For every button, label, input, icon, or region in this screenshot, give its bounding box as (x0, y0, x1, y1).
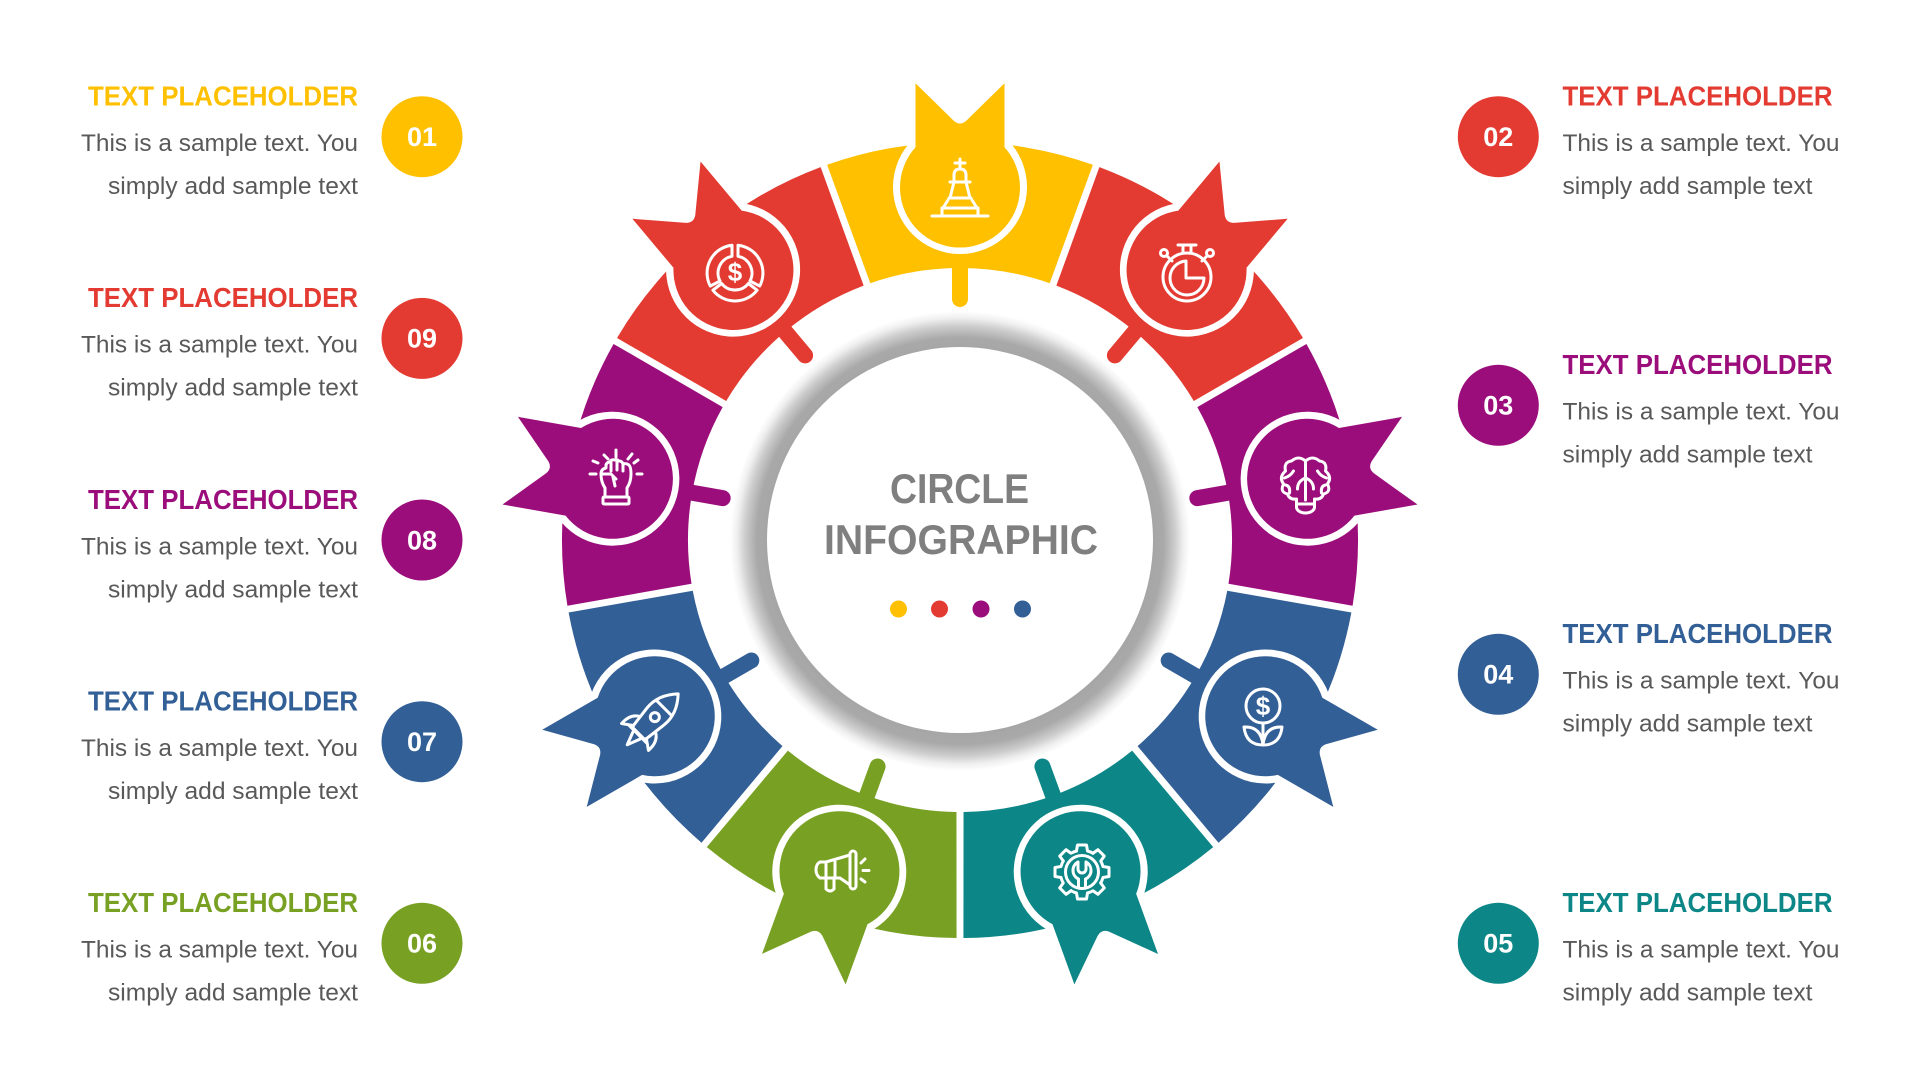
center circle (767, 347, 1153, 733)
icon: brain bulb (1281, 458, 1330, 513)
segment 09 red (565, 105, 912, 447)
icon: money plant (1244, 689, 1282, 745)
segment 04 blue (1095, 541, 1422, 883)
item 08: simply add sample text (108, 576, 358, 603)
icon: chess king (932, 159, 988, 216)
item 07: TEXT PLACEHOLDER (88, 686, 358, 716)
item 06: 06 (407, 929, 437, 959)
segment 07 blue (498, 541, 825, 883)
item 04: This is a sample text. You (1562, 668, 1840, 695)
item 05: simply add sample text (1562, 980, 1813, 1007)
item 07 (81, 686, 462, 805)
center dots (890, 600, 1031, 618)
item 03: This is a sample text. You (1562, 399, 1840, 426)
center circle shadow (730, 311, 1190, 771)
item 07: simply add sample text (108, 778, 358, 805)
item 05: This is a sample text. You (1562, 937, 1840, 964)
icon: dollar chart: $ (728, 257, 743, 287)
item 07: This is a sample text. You (81, 735, 358, 762)
item 05: TEXT PLACEHOLDER (1562, 887, 1832, 918)
item 08: This is a sample text. You (81, 533, 358, 560)
item 09: simply add sample text (108, 375, 358, 402)
icon: gear wrench (1055, 845, 1109, 899)
item 05: 05 (1483, 929, 1513, 959)
segment 01 yellow (827, 83, 1093, 307)
segment 02 red (1008, 105, 1355, 447)
item 01 (81, 80, 462, 200)
item 03: 03 (1483, 391, 1513, 421)
icon: rocket (614, 680, 692, 758)
item 07: 07 (407, 727, 437, 757)
item 09: TEXT PLACEHOLDER (88, 282, 358, 313)
item 02: 02 (1483, 122, 1513, 152)
item 06: TEXT PLACEHOLDER (88, 887, 358, 918)
segment 06 green (679, 713, 1005, 1015)
item 03 (1458, 349, 1840, 469)
item 08: TEXT PLACEHOLDER (88, 484, 358, 515)
segment 03 purple (1166, 330, 1433, 630)
item 05 (1458, 887, 1840, 1007)
center title (824, 465, 1098, 563)
icon: raised fist (590, 450, 642, 504)
item 04: TEXT PLACEHOLDER (1562, 618, 1832, 649)
icon: dollar chart (707, 245, 763, 301)
item 06 (81, 887, 462, 1007)
item 09: This is a sample text. You (81, 332, 358, 359)
item 03: TEXT PLACEHOLDER (1562, 349, 1832, 380)
item 09 (81, 282, 462, 402)
item 03: simply add sample text (1562, 442, 1813, 469)
item 01: 01 (407, 122, 437, 152)
item 02: TEXT PLACEHOLDER (1562, 80, 1832, 112)
item 08: 08 (407, 525, 437, 555)
center title: CIRCLE (890, 465, 1029, 512)
item 02 (1458, 80, 1840, 200)
item 06: simply add sample text (108, 980, 358, 1007)
item 02: simply add sample text (1562, 173, 1813, 200)
item 01: simply add sample text (108, 173, 358, 200)
icon: stopwatch (1160, 245, 1214, 301)
item 02: This is a sample text. You (1562, 130, 1840, 157)
item 06: This is a sample text. You (81, 937, 358, 964)
item 09: 09 (407, 324, 437, 354)
item 04 (1458, 618, 1840, 738)
item 01: TEXT PLACEHOLDER (88, 80, 358, 112)
item 04: simply add sample text (1562, 711, 1813, 738)
icon: megaphone (816, 851, 869, 891)
item 04: 04 (1483, 660, 1513, 690)
item 08 (81, 484, 462, 603)
segment 08 purple (487, 330, 754, 630)
icon: money plant: $ (1256, 691, 1271, 721)
segment 05 teal (915, 713, 1241, 1015)
center title: INFOGRAPHIC (824, 516, 1098, 563)
item 01: This is a sample text. You (81, 130, 358, 157)
